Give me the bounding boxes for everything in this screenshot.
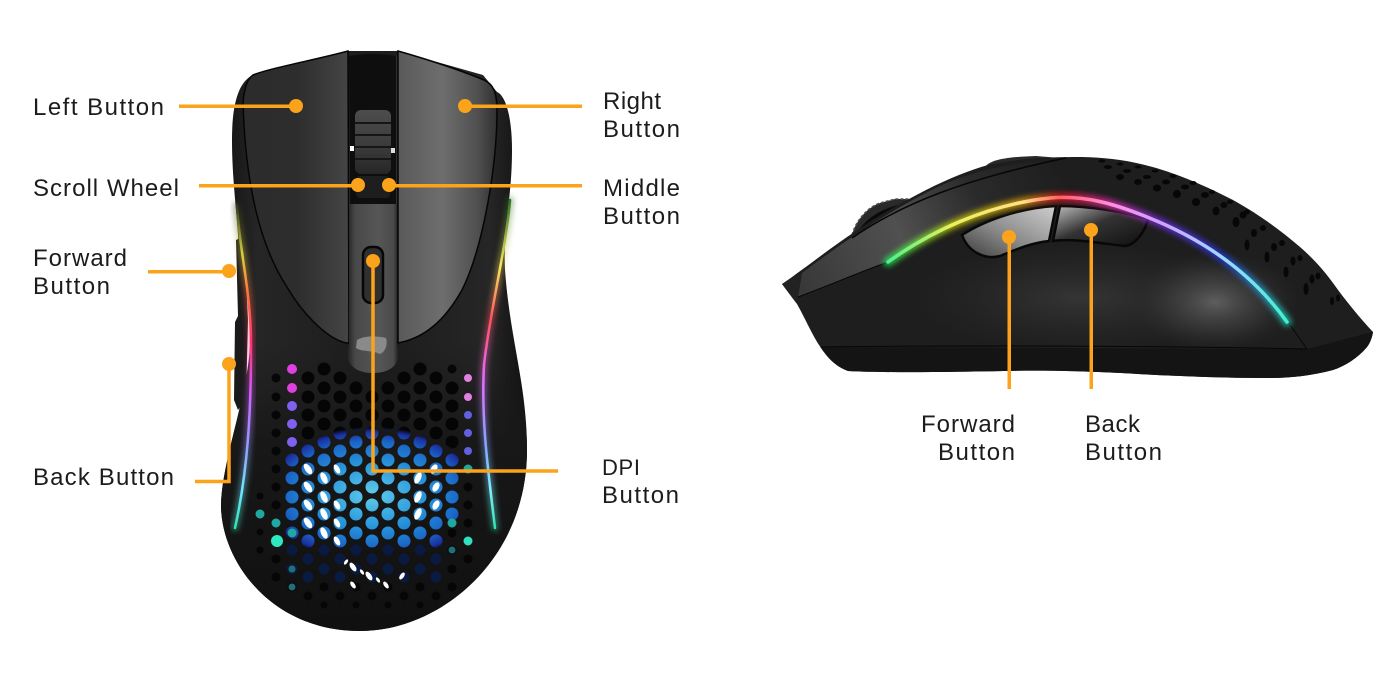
logo — [356, 336, 387, 354]
side buttons — [234, 236, 248, 410]
callout: side forward button — [1002, 230, 1016, 389]
label: Back Button: Back Button — [33, 464, 174, 491]
callout: left button — [179, 99, 303, 113]
front panel — [798, 168, 1008, 296]
back button side — [1053, 206, 1148, 246]
callout: scroll wheel — [199, 178, 365, 192]
see-through slits — [302, 462, 441, 589]
label: Forward Button: Forward — [33, 245, 127, 272]
label: Forward Button: Button — [33, 273, 110, 300]
label: DPI Button: Button — [602, 482, 679, 509]
scroll wheel side — [852, 199, 909, 238]
callout: forward button — [148, 264, 236, 278]
callout: DPI button — [366, 254, 558, 471]
callout: back button — [195, 357, 236, 482]
label: side Forward Button: Button — [938, 439, 1015, 466]
label: Scroll Wheel: Scroll Wheel — [33, 175, 179, 202]
label: side Back Button: Back — [1085, 411, 1141, 438]
side body — [782, 157, 1373, 378]
label: Middle Button: Middle — [603, 175, 680, 202]
side buttons — [962, 206, 1148, 257]
scroll slot — [349, 54, 396, 204]
forward button side — [962, 206, 1056, 257]
callout: right button — [458, 99, 582, 113]
perforation dots — [1098, 160, 1340, 305]
DPI button — [363, 247, 383, 303]
body sheen and shading — [782, 168, 1373, 378]
seam lines — [798, 158, 1307, 349]
label: Middle Button: Button — [603, 203, 680, 230]
side LED arc — [888, 197, 1287, 322]
label: DPI Button: DPI — [602, 455, 640, 480]
right LED strip — [483, 200, 510, 528]
mouse side view — [780, 156, 1380, 390]
scroll wheel — [350, 110, 395, 198]
label: Right Button: Button — [603, 116, 680, 143]
left button — [243, 51, 349, 343]
label: side Forward Button: Forward — [921, 411, 1015, 438]
front nose — [782, 283, 796, 302]
palm shade — [221, 340, 527, 631]
label: Right Button: Right — [603, 88, 661, 115]
center column — [347, 56, 399, 373]
right button — [398, 51, 497, 343]
callout: middle button — [382, 178, 582, 192]
callout: side back button — [1084, 223, 1098, 389]
honeycomb holes — [260, 369, 468, 605]
left LED strip — [235, 205, 251, 528]
mouse top view — [221, 51, 527, 631]
top button — [985, 156, 1060, 167]
lower band — [820, 332, 1373, 378]
label: side Back Button: Button — [1085, 439, 1162, 466]
mouse body — [221, 51, 527, 631]
label: Left Button: Left Button — [33, 94, 164, 121]
